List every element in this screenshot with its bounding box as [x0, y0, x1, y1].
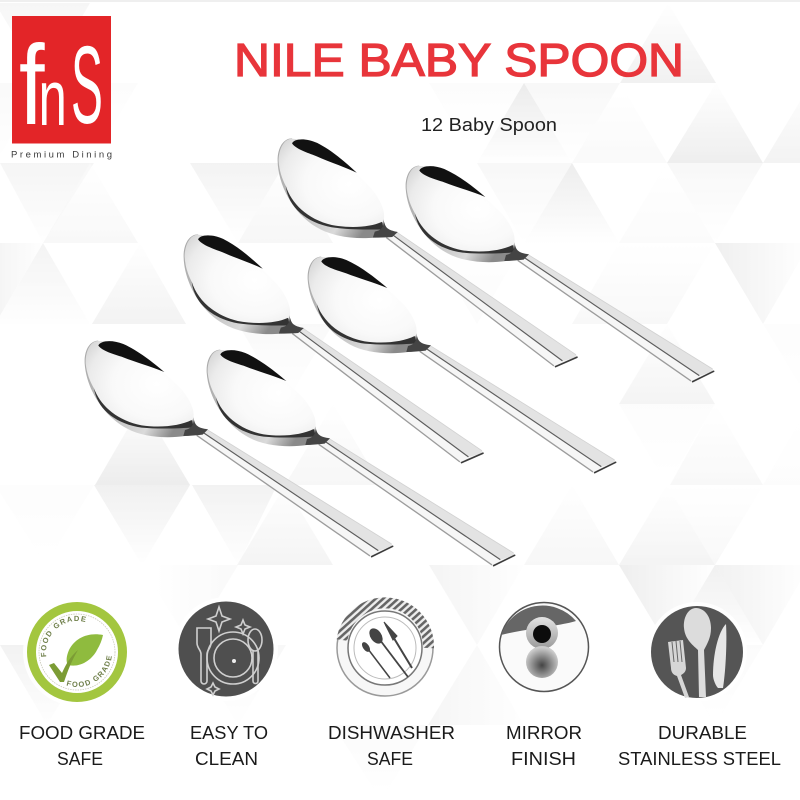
label: easy to clean: EASY TO [190, 722, 268, 743]
cutlery: spoon [684, 608, 711, 697]
label: durable stainless steel: DURABLE [658, 722, 747, 743]
spoon: front row left [85, 341, 393, 557]
label: dishwasher safe: SAFE [367, 748, 413, 769]
label: dishwasher safe [328, 722, 455, 769]
icon: dishwasher safe plate [333, 596, 437, 700]
title: NILE BABY SPOON [234, 34, 684, 86]
spoon: back row left [269, 138, 586, 368]
spoon: back row right [406, 166, 714, 382]
label: easy to clean: CLEAN [195, 748, 258, 769]
cutlery: knife [713, 624, 726, 688]
logo letters [19, 21, 103, 148]
logo letters: f [19, 21, 45, 148]
logo letters: n [38, 55, 67, 143]
cutlery: fork [668, 640, 689, 698]
label: food grade safe [19, 722, 145, 769]
icon: mirror finish [494, 597, 594, 697]
label: mirror finish: FINISH [511, 748, 576, 769]
label: mirror finish [506, 722, 582, 769]
label: food grade safe: FOOD GRADE [19, 722, 145, 743]
subtitle: 12 Baby Spoon [421, 115, 557, 135]
label: food grade safe: SAFE [57, 748, 103, 769]
label: mirror finish: MIRROR [506, 722, 582, 743]
spoon: middle row left [175, 234, 492, 464]
spoons: product photo group [85, 138, 714, 566]
logo: fnS Premium Dining [11, 16, 112, 160]
logo red square [12, 16, 111, 144]
icon: food grade badge [23, 602, 127, 702]
label: easy to clean [190, 722, 268, 769]
icon: easy to clean plate [174, 597, 278, 701]
icon: durable stainless steel cutlery [647, 602, 747, 702]
icon: food grade badge: FOOD GRADE [40, 616, 86, 657]
spoon: middle row right [308, 257, 616, 473]
logo tagline: Premium Dining [11, 150, 112, 160]
logo letters: S [71, 24, 103, 148]
icon: food grade badge: FOOD GRADE [66, 656, 112, 687]
label: durable stainless steel: STAINLESS STEEL [618, 748, 781, 769]
spoon: front row right [207, 350, 515, 566]
label: dishwasher safe: DISHWASHER [328, 722, 455, 743]
label: durable stainless steel [618, 722, 781, 769]
